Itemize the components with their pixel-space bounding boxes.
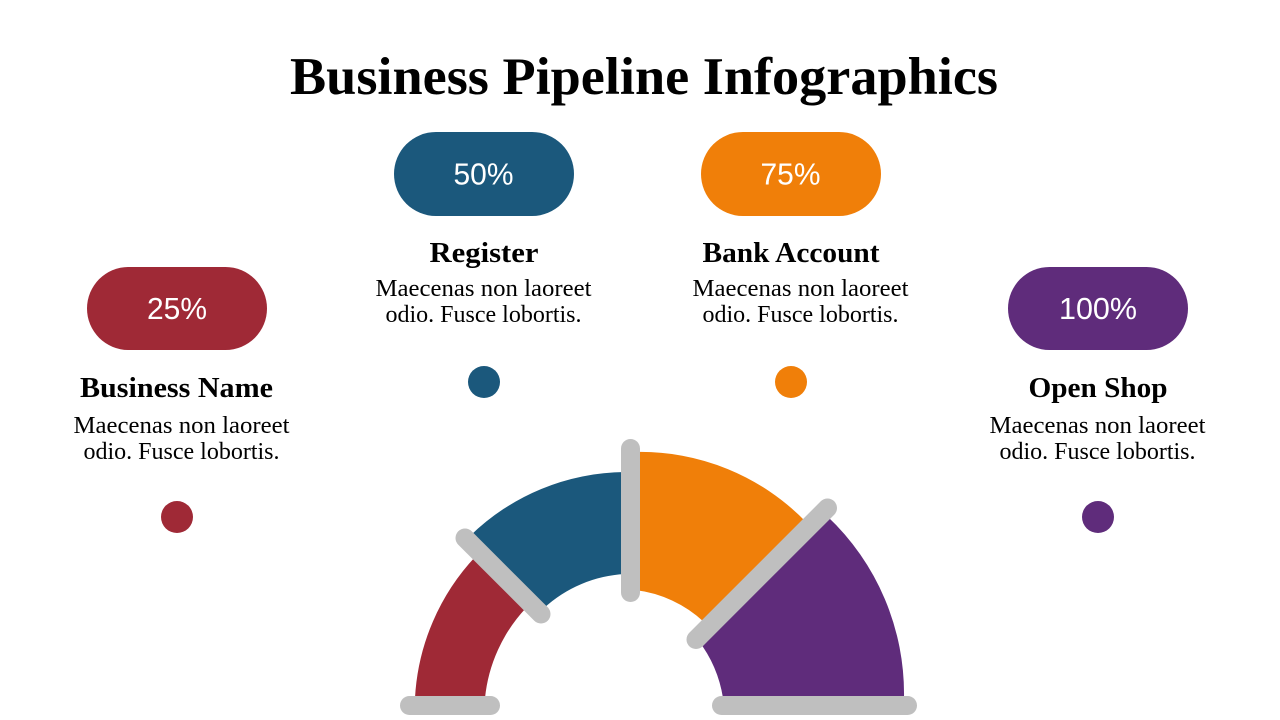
divider: left diagonal bbox=[465, 538, 541, 614]
text: business name description: Maecenas non laoreet bbox=[74, 413, 290, 439]
base: left bbox=[400, 696, 500, 715]
marker dot: blue bbox=[468, 366, 500, 398]
text: bank account description: odio. Fusce lobortis. bbox=[702, 302, 898, 328]
heading: business name: Business Name bbox=[80, 372, 273, 404]
text: open shop description bbox=[990, 413, 1206, 465]
title: Business Pipeline Infographics bbox=[290, 48, 998, 106]
heading: open shop: Open Shop bbox=[1028, 372, 1168, 404]
text: bank account description bbox=[692, 276, 909, 328]
marker dot: purple bbox=[1082, 501, 1114, 533]
base: right bbox=[712, 696, 917, 715]
badge: 50% bbox=[394, 132, 574, 216]
badge: 25%: 25% bbox=[147, 291, 207, 326]
segment: orange bbox=[635, 452, 806, 622]
text: open shop description: odio. Fusce lobortis. bbox=[1000, 439, 1196, 465]
text: register description bbox=[376, 276, 592, 328]
divider: right diagonal bbox=[696, 508, 828, 640]
marker dot: orange bbox=[775, 366, 807, 398]
panel: register bbox=[376, 132, 592, 398]
panel: bank account bbox=[692, 132, 909, 398]
marker dot: red bbox=[161, 501, 193, 533]
text: business name description bbox=[74, 413, 290, 465]
text: business name description: odio. Fusce lobortis. bbox=[84, 439, 280, 465]
heading: bank account: Bank Account bbox=[702, 237, 880, 269]
badge: 25% bbox=[87, 267, 267, 350]
badge: 75%: 75% bbox=[760, 156, 820, 192]
text: register description: odio. Fusce lobortis. bbox=[386, 302, 582, 328]
chart: pipeline gauge bbox=[400, 448, 917, 715]
segment: purple bbox=[698, 516, 904, 698]
text: open shop description: Maecenas non laoreet bbox=[990, 413, 1206, 439]
badge: 75% bbox=[701, 132, 881, 216]
heading: register: Register bbox=[430, 237, 539, 269]
panel: open shop bbox=[990, 267, 1206, 533]
segment: red bbox=[415, 556, 526, 698]
badge: 100% bbox=[1008, 267, 1188, 350]
text: bank account description: Maecenas non laoreet bbox=[692, 276, 909, 302]
text: register description: Maecenas non laoreet bbox=[376, 276, 592, 302]
badge: 100%: 100% bbox=[1059, 291, 1137, 326]
panel: business name bbox=[74, 267, 290, 533]
badge: 50%: 50% bbox=[454, 156, 514, 192]
divider: centre vertical bbox=[621, 448, 640, 592]
segment: blue bbox=[470, 472, 625, 608]
